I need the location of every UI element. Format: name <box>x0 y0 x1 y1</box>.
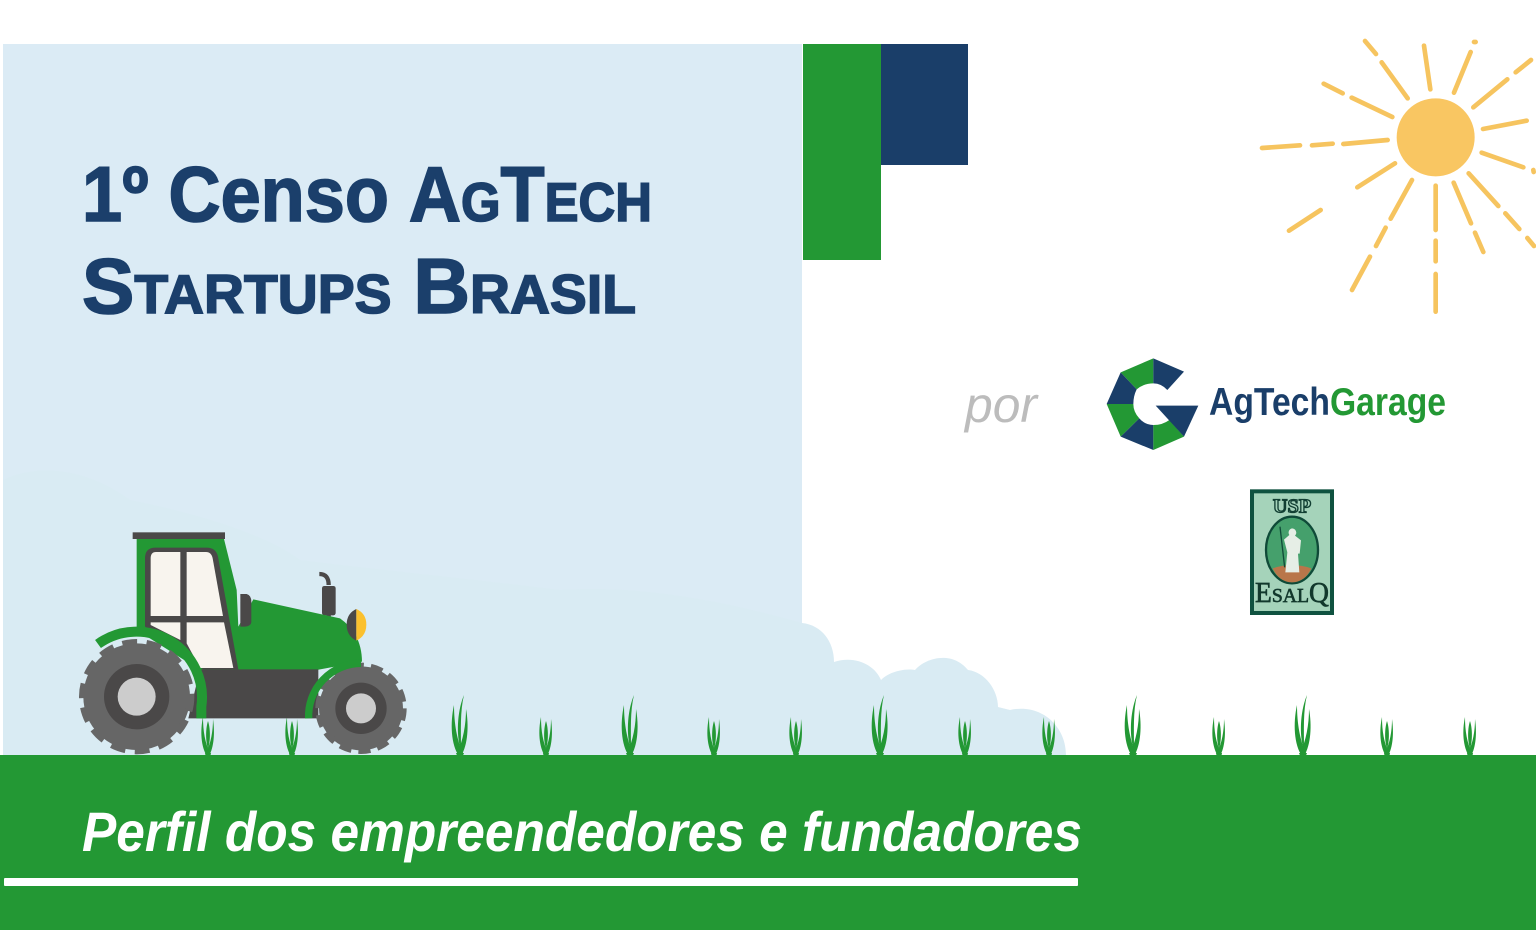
panel: sky background <box>3 44 802 755</box>
chassis <box>188 669 318 718</box>
title <box>82 150 652 330</box>
rear wheel <box>83 643 191 751</box>
soil <box>1273 565 1311 582</box>
subtitle underline <box>4 878 1078 886</box>
USP lettering: USP <box>1273 495 1311 517</box>
title: Startups Brasil <box>82 242 636 330</box>
rear fender <box>98 632 202 718</box>
exhaust pipe <box>319 574 329 622</box>
cab roof <box>133 532 225 539</box>
ground band <box>0 755 1536 930</box>
logo wordmark: AgTechGarage <box>1209 381 1446 424</box>
staff <box>1280 527 1285 567</box>
logo: AgTechGarage <box>1107 358 1446 450</box>
logo symbol <box>1107 358 1198 450</box>
subtitle: Perfil dos empreendedores e fundadores <box>82 800 1082 863</box>
grass row <box>201 695 1476 758</box>
decorative block: green <box>803 44 881 260</box>
icon: sun <box>1262 41 1534 312</box>
decorative block: navy <box>881 44 968 165</box>
logo: USP ESALQ <box>1252 491 1332 613</box>
headlight <box>347 609 356 641</box>
front fender <box>309 663 361 718</box>
ESALQ lettering: EsalQ <box>1255 578 1329 609</box>
title: 1º Censo AgTech <box>82 150 652 238</box>
window frame <box>145 548 238 669</box>
background clouds <box>3 470 1066 755</box>
illustration: tractor <box>83 532 403 751</box>
mirror <box>240 594 251 627</box>
statue <box>1284 528 1301 572</box>
cab and hood <box>137 539 362 670</box>
window panes <box>151 552 233 668</box>
text: por: por <box>963 377 1039 433</box>
front wheel <box>319 666 403 751</box>
emblem oval <box>1266 517 1318 583</box>
